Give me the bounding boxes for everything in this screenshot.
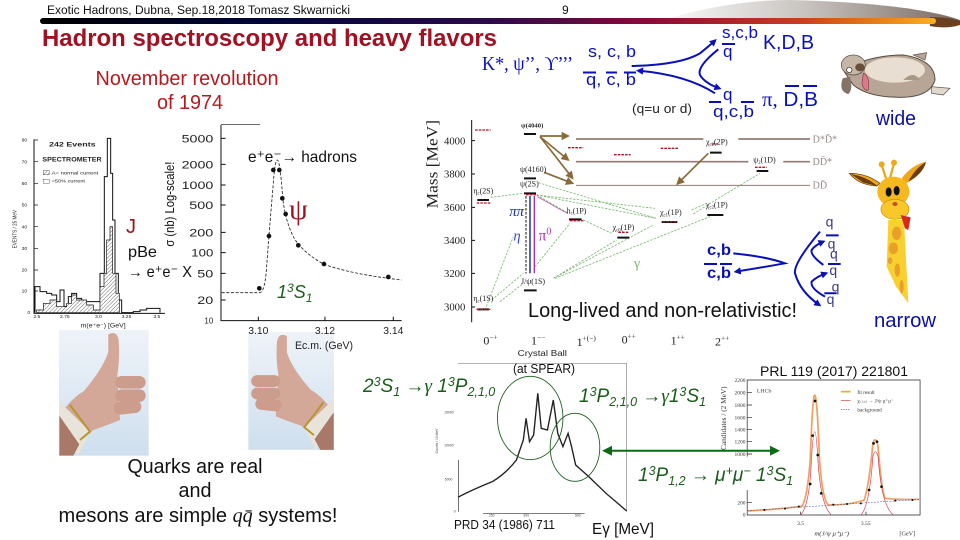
diagram: heavy quark pair: c,b	[707, 265, 731, 282]
chart: J peak histogram: m(e⁺e⁻) [GeV]	[81, 322, 126, 329]
level labels: (2S)	[480, 186, 494, 195]
label: pBe to e+e-X: → e⁺e⁻ X	[128, 264, 192, 281]
icon: giraffe	[849, 160, 926, 303]
formula: 1 3P to gamma 1 3S: P	[597, 386, 610, 407]
level labels: (1S)	[480, 294, 494, 303]
quantum numbers: 0	[622, 332, 628, 346]
formula: 1 3P to mu mu 1 3S: 3	[766, 464, 773, 478]
chart: psi peak cross section	[163, 124, 404, 337]
chart: LHCb mass spectrum: 2200	[734, 378, 746, 384]
chart: Crystal Ball spectrum	[435, 363, 627, 518]
chart: LHCb mass spectrum: 1600	[734, 415, 746, 421]
label: 1 3S1: 1	[306, 291, 312, 305]
chart: charmonium level diagram: DD̄*	[813, 156, 832, 168]
formula: 1 3P to mu mu 1 3S: 1	[638, 465, 649, 486]
level labels: χ	[613, 223, 616, 232]
chart: J peak histogram: A= normal current	[52, 170, 99, 176]
quantum numbers: +(−)	[583, 334, 596, 343]
quantum numbers: −−	[537, 333, 545, 342]
quantum numbers: 1	[671, 333, 677, 347]
level labels: (1P)	[668, 208, 682, 217]
label: E gamma axis: Eγ [MeV]	[592, 521, 654, 538]
chart: LHCb mass spectrum: 1000	[734, 452, 746, 458]
chart: LHCb mass spectrum: background	[857, 407, 882, 413]
formula: 1 3P to gamma 1 3S: 1	[579, 386, 590, 407]
label: s, c, b: s, c, b	[588, 42, 636, 61]
arrow: heavy quark line	[733, 253, 785, 272]
chart: J peak histogram: 80	[22, 138, 27, 144]
label: PRD reference: PRD 34 (1986) 711	[454, 517, 555, 532]
chart: LHCb mass spectrum: fit result	[857, 389, 875, 396]
label: s,c,b over q: q	[723, 42, 732, 61]
photo: thumbs up left	[59, 330, 149, 456]
chart: J peak histogram: 0	[27, 310, 30, 316]
chart: psi peak cross section: 200	[189, 227, 213, 239]
chart: charmonium level diagram: 3000	[444, 303, 465, 314]
chart: LHCb mass spectrum	[719, 378, 920, 537]
chart: Crystal Ball spectrum: 10000	[444, 444, 454, 448]
label: 1 3S1: 1	[277, 282, 287, 302]
chart: Crystal Ball spectrum: 250	[489, 514, 495, 518]
quantum numbers: −+	[489, 333, 498, 342]
chart: J peak histogram	[13, 138, 165, 329]
chart: LHCb mass spectrum: 1400	[734, 427, 746, 433]
chart: Crystal Ball spectrum: 5000	[445, 478, 453, 482]
chart: LHCb mass spectrum: 0	[743, 513, 746, 519]
chart: LHCb mass spectrum: χc1,c2 → J/ψ μ⁺μ⁻	[857, 398, 894, 404]
chart: LHCb mass spectrum: 2000	[734, 391, 746, 397]
chart: LHCb mass spectrum: 200	[737, 501, 746, 507]
chart: J peak histogram: 2.5	[33, 314, 40, 320]
photo: thumbs up right	[248, 332, 334, 450]
chart: psi peak cross section: 3.10	[248, 326, 269, 337]
diagram: light quark pairs: q	[827, 291, 834, 307]
chart: charmonium level diagram: D*D̄*	[813, 133, 837, 145]
label: PRL reference: PRL 119 (2017) 221801	[760, 363, 908, 379]
chart: LHCb mass spectrum: 1800	[734, 403, 746, 409]
level labels: c1	[664, 213, 669, 218]
chart: charmonium level diagram: Mass [MeV]	[424, 120, 441, 208]
level labels: χ	[660, 208, 664, 217]
chart: LHCb mass spectrum: 3.55	[861, 521, 871, 527]
chart: psi peak cross section: 20	[197, 295, 213, 307]
chart: J peak histogram: 10	[22, 289, 27, 295]
text mask behind green formula	[636, 459, 796, 485]
formula: 2 3S1 to gamma 1 3P: 3	[448, 375, 455, 389]
quantum numbers: ++	[677, 333, 685, 342]
chart: psi peak cross section: 3.12	[315, 326, 335, 337]
open charm thresholds	[576, 139, 810, 185]
formula: 1 3P to mu mu 1 3S: +	[726, 464, 733, 478]
formula: 1 3P to gamma 1 3S: 3	[679, 385, 686, 399]
chart: Crystal Ball spectrum: 300	[523, 514, 529, 518]
arrows: quark lines top	[632, 41, 719, 93]
chart: Crystal Ball spectrum: Counts / 10 MeV	[435, 428, 439, 453]
transition labels: ππ	[509, 204, 525, 220]
chart: Crystal Ball spectrum: 0	[454, 510, 456, 514]
conclusion text: mesons are simple qq̄ systems!	[58, 505, 338, 527]
diagram: quark mixing top	[482, 23, 818, 121]
formula: 1 3P to mu mu 1 3S: 1	[751, 465, 766, 486]
formula: 1 3P to mu mu 1 3S: μ	[732, 465, 744, 486]
formula: 2 3S1 to gamma 1 3P: 2,1,0	[466, 385, 495, 399]
chart: J peak histogram: 70	[22, 159, 27, 165]
chart: J peak histogram: 60	[22, 181, 27, 187]
diagram: light quark pairs: q	[829, 262, 837, 278]
level labels: J/ψ(1S)	[521, 277, 545, 286]
level labels: χ	[706, 200, 710, 209]
label: q over q,c,b	[709, 85, 754, 121]
formula: 2 3S1 to gamma 1 3P: 3	[374, 375, 381, 389]
chart: psi peak cross section: 10	[204, 316, 214, 325]
quantum numbers: 0	[483, 333, 489, 347]
label: K,D,B: K,D,B	[763, 32, 814, 54]
formula: 1 3P to gamma 1 3S: S	[686, 386, 699, 407]
label: narrow: narrow	[874, 310, 937, 332]
formula: 1 3P to mu mu 1 3S: 3	[649, 464, 656, 478]
chart: LHCb mass spectrum: m(J/ψ μ⁺μ⁻)	[814, 530, 850, 537]
chart: charmonium level diagram: 3600	[444, 203, 465, 214]
chart: LHCb mass spectrum: 3.5	[797, 521, 804, 527]
formula: 1 3P to mu mu 1 3S: → μ	[686, 465, 726, 486]
label: 1 3S1: S	[294, 282, 306, 302]
diagram: light quark pairs: q	[830, 245, 838, 261]
chart: LHCb mass spectrum: 1200	[734, 440, 746, 446]
conclusion text	[58, 456, 338, 527]
diagram: heavy quark pair: c,b	[707, 242, 731, 259]
chart: LHCb mass spectrum: LHCb	[757, 389, 772, 395]
level labels: 2	[758, 161, 761, 166]
subtitle: November revolution: of 1974	[157, 92, 223, 114]
level labels: (2P)	[714, 138, 728, 147]
chart: Crystal Ball spectrum: 15000	[444, 410, 454, 414]
formula: 1 3P to gamma 1 3S: 2,1,0	[608, 395, 637, 409]
formula: 1 3P to mu mu 1 3S: 1	[786, 474, 793, 488]
chart: charmonium level diagram: π	[539, 228, 546, 245]
chart: psi peak cross section: 2000	[182, 159, 213, 171]
quantum numbers: ++	[628, 332, 636, 341]
label: anti q c b: q, c, b	[586, 70, 636, 89]
chart: psi peak cross section: σ (nb) Log-scale!	[163, 162, 177, 247]
hadronic transitions	[537, 197, 567, 213]
diagram: light quark pairs: q	[832, 279, 839, 295]
chart: Crystal Ball spectrum: 500	[575, 514, 581, 518]
quantum numbers: 2	[715, 334, 721, 348]
chart: LHCb mass spectrum: [GeV]	[899, 531, 915, 537]
label: J: J	[126, 216, 136, 238]
formula: 2 3S1 to gamma 1 3P: P	[455, 376, 468, 397]
chart: J peak histogram: 20	[22, 268, 27, 274]
formula: 2 3S1 to gamma 1 3P: 2	[363, 376, 374, 397]
chart: psi peak cross section: 100	[191, 248, 213, 260]
formula: 1 3P to gamma 1 3S: 3	[590, 385, 597, 399]
brown decay arrows	[540, 136, 708, 184]
level labels: (1P)	[621, 223, 635, 232]
chart: J peak histogram: 50	[22, 203, 27, 209]
formula: 2 3S1 to gamma 1 3P: S	[381, 376, 394, 397]
level labels: c2	[710, 143, 715, 148]
level labels: ψ(4160)	[520, 165, 547, 174]
chart: charmonium level diagram	[424, 120, 837, 358]
formula: 2 3S1 to gamma 1 3P: 1	[393, 385, 400, 399]
chart: J peak histogram: 3.0	[95, 314, 102, 320]
chart: J peak histogram: 242 Events	[49, 143, 97, 149]
title: Hadron spectroscopy and heavy flavors	[42, 25, 497, 52]
diagram: light quark pairs	[795, 214, 841, 307]
chart: J peak histogram: SPECTROMETER	[42, 158, 102, 164]
formula: 1 3P to mu mu 1 3S: S	[773, 465, 786, 486]
formula: 1 3P to mu mu 1 3S: −	[743, 464, 751, 478]
level labels: c	[571, 212, 573, 217]
formula: 1 3P to mu mu 1 3S: P	[656, 465, 669, 486]
header banner	[40, 0, 960, 27]
chart: psi peak cross section: 500	[189, 200, 213, 212]
formula: 1 3P to mu mu 1 3S: 1,2	[668, 474, 686, 488]
chart: psi peak cross section: 3.14	[383, 326, 404, 337]
level labels: c2	[710, 206, 715, 211]
label: Ec.m.: Ec.m. (GeV)	[295, 340, 353, 352]
label: psi: ψ	[289, 193, 308, 226]
level labels: (1D)	[761, 156, 776, 165]
levels	[477, 134, 768, 309]
chart: J peak histogram: EVENTS / 25 MeV	[13, 210, 19, 248]
label: at SPEAR: (at SPEAR)	[513, 361, 575, 376]
label: pi, D, B: π, D,B	[762, 89, 818, 111]
chart: J peak histogram: 3.25	[122, 314, 132, 320]
formula: 2 3S1 to gamma 1 3P: →	[400, 376, 424, 397]
chart: charmonium level diagram: η	[513, 229, 521, 245]
chart: psi peak cross section: 50	[197, 268, 213, 280]
chart: charmonium level diagram: 4000	[444, 136, 465, 147]
level labels: (1P)	[714, 200, 728, 209]
label: s,c,b over q: s,c,b	[722, 23, 758, 42]
label: s,c,b over q	[722, 23, 758, 61]
label: wide: wide	[875, 108, 916, 130]
subtitle: November revolution	[96, 68, 278, 114]
chart: charmonium level diagram: DD̄	[813, 180, 827, 192]
green transitions	[485, 173, 760, 310]
level labels: ψ	[753, 156, 758, 165]
chart: psi peak cross section: 1000	[182, 180, 213, 192]
level labels: c0	[616, 228, 621, 233]
level labels: η	[473, 294, 478, 303]
diagram: heavy quark pair	[704, 242, 732, 282]
chart: J peak histogram: =50% current	[52, 179, 86, 185]
level labels: c	[478, 192, 480, 197]
formula: 1 3P to gamma 1 3S: γ1	[661, 386, 679, 407]
level labels: (1P)	[573, 206, 587, 215]
level labels: h	[567, 206, 571, 215]
chart: charmonium level diagram: 3400	[444, 236, 465, 247]
quantum numbers	[483, 332, 729, 349]
page number: 9	[562, 3, 569, 17]
chart: charmonium level diagram: Crystal Ball	[518, 348, 567, 358]
label: q over q,c,b: q	[723, 85, 732, 104]
formula: 1 3P to gamma 1 3S: 1	[699, 395, 706, 409]
label: e+e- to hadrons: e⁺e⁻→ hadrons	[248, 149, 357, 166]
arrow: green double arrow	[607, 450, 775, 452]
chart: charmonium level diagram: 0	[546, 227, 551, 238]
header text: talk info: Exotic Hadrons, Dubna, Sep.18,2018 Tomasz Skwarnicki	[47, 3, 350, 17]
label: K*, psi'', Upsilon''': K*, ψ’’, ϒ’’’	[482, 53, 573, 75]
chart: charmonium level diagram: γ	[633, 256, 640, 271]
quantum numbers: 1	[577, 335, 583, 349]
chart: charmonium level diagram: 3800	[444, 170, 465, 181]
statement: long-lived: Long-lived and non-relativistic!	[528, 300, 797, 322]
label: pBe to e+e-X	[128, 244, 192, 281]
chart: J peak histogram: 40	[22, 224, 27, 230]
formula: 2 3S1 to gamma 1 3P: γ 1	[424, 376, 448, 397]
chart: psi peak cross section: 5000	[182, 133, 213, 145]
note: q=u or d: (q=u or d)	[632, 101, 692, 116]
conclusion text: Quarks are real	[128, 456, 262, 478]
level labels	[473, 122, 776, 304]
chart: charmonium level diagram: 3200	[444, 269, 465, 280]
label: pBe to e+e-X: pBe	[128, 244, 157, 261]
icon: fat dog	[841, 53, 950, 97]
conclusion text: and	[178, 480, 212, 502]
level labels: η	[473, 186, 478, 195]
level labels: ψ(2S)	[520, 179, 539, 188]
quantum numbers: ++	[721, 334, 729, 343]
chart: J peak histogram: 3.5	[153, 314, 160, 320]
chart: LHCb mass spectrum: Candidates / (2 MeV)	[719, 386, 728, 450]
level labels: c	[478, 299, 480, 304]
chart: J peak histogram: 30	[22, 246, 27, 252]
diagram: light quark pairs: q	[826, 214, 833, 230]
level labels: ψ(4040)	[521, 122, 543, 129]
label: 1 3S1: 3	[287, 281, 294, 295]
chart: J peak histogram: 2.75	[60, 314, 70, 320]
diagram: light quark pairs: q	[828, 235, 835, 251]
level labels: χ	[706, 138, 710, 147]
quantum numbers: 1	[531, 333, 537, 347]
formula: 1 3P to gamma 1 3S: →	[637, 386, 661, 407]
label: q over q,c,b: q,c,b	[713, 102, 754, 121]
subtitle: November revolution: November revolution	[96, 68, 278, 90]
